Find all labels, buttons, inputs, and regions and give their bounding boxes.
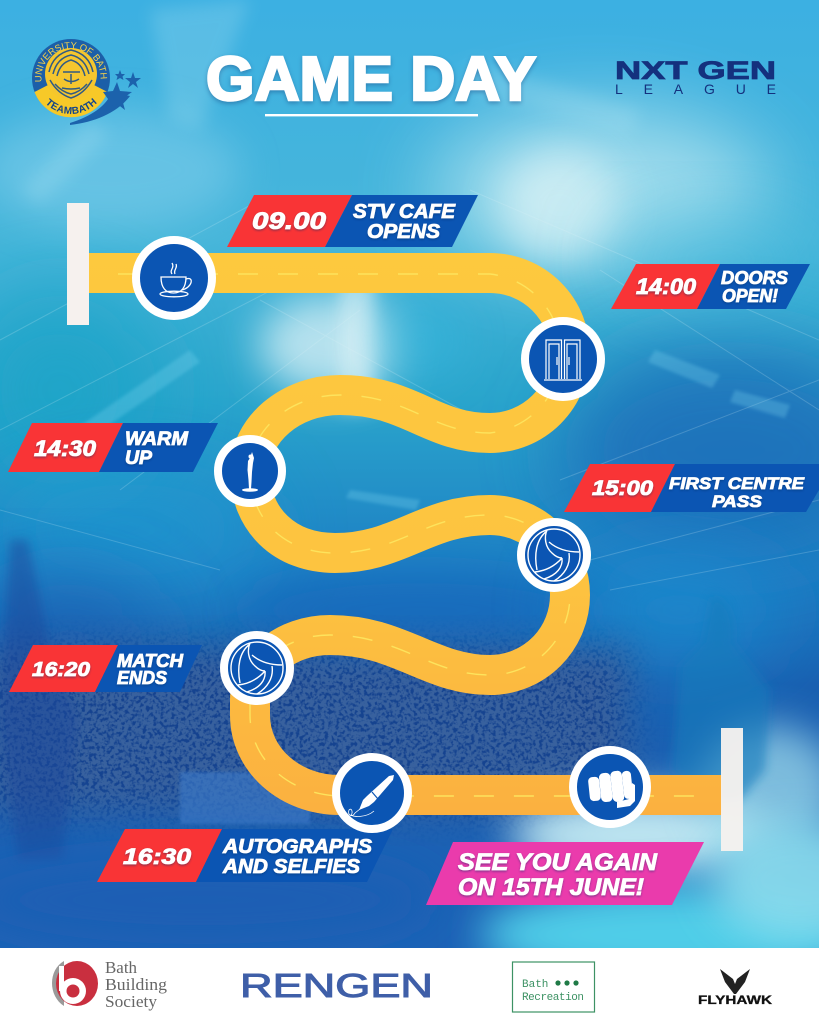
- label: 16:30 Autographs and selfies: 16:30: [123, 844, 192, 869]
- label: 14:30 Warm up: UP: [125, 448, 152, 469]
- court floor light: [510, 793, 770, 877]
- stop: netball 2: [224, 635, 290, 701]
- logo: Team Bath crest: TEAMBATH: [46, 98, 97, 114]
- crowd stands: [0, 630, 644, 827]
- label: 14:30 Warm up: WARM: [125, 429, 189, 450]
- label: 16:20 Match ends: 16:20: [32, 659, 90, 681]
- roof structure: [0, 190, 819, 590]
- logo: NXT GEN League: [615, 57, 776, 97]
- sponsor: Bath Recreation: [512, 962, 594, 1012]
- label: 15:00 First centre pass: 15:00: [592, 477, 653, 500]
- label: 09.00 STV Cafe opens: STV CAFE: [353, 201, 456, 223]
- stop: netball: [521, 522, 587, 588]
- logo: NXT GEN League: NXT GEN: [615, 57, 776, 85]
- callout: see you again: [426, 842, 704, 905]
- logo: NXT GEN League: LEAGUE: [615, 81, 776, 97]
- label: 15:00 First centre pass: FIRST CENTRE: [669, 474, 805, 493]
- sponsor: Flyhawk: [698, 969, 772, 1007]
- label: 09.00 STV Cafe opens: OPENS: [367, 221, 441, 243]
- label: 09.00 STV Cafe opens: 09.00: [252, 208, 327, 235]
- sponsor: Bath Building Society: Society: [105, 992, 158, 1011]
- callout: see you again: SEE YOU AGAIN: [458, 849, 658, 876]
- label: 16:20 Match ends: MATCH: [117, 651, 184, 671]
- stop: doors: [525, 321, 601, 397]
- sponsor: Bath Recreation: Bath: [522, 979, 548, 991]
- label: 16:30 Autographs and selfies: AND SELFIES: [222, 856, 361, 878]
- sponsor: Bath Building Society: Bath: [105, 958, 137, 977]
- label: 14:30 Warm up: 14:30: [34, 436, 97, 461]
- finish bar: [721, 728, 743, 851]
- label: 14:00 Doors open: [611, 264, 810, 309]
- label: 15:00 First centre pass: PASS: [712, 492, 763, 511]
- label: 15:00 First centre pass: [564, 464, 819, 512]
- label: 16:30 Autographs and selfies: AUTOGRAPHS: [222, 836, 373, 858]
- sponsor: Rengen: RENGEN: [240, 967, 433, 1004]
- stop: coffee: [136, 240, 212, 316]
- stop: pen: [336, 757, 408, 829]
- label: 14:30 Warm up: [8, 423, 218, 472]
- label: 09.00 STV Cafe opens: [227, 195, 478, 247]
- label: 16:20 Match ends: [9, 645, 202, 692]
- sponsor: Flyhawk: FLYHAWK: [698, 993, 772, 1007]
- logo: Team Bath crest: UNIVERSITY OF BATH: [34, 42, 108, 82]
- label: 14:00 Doors open: DOORS: [721, 268, 788, 288]
- logo: Team Bath crest: [32, 39, 141, 125]
- label: 14:00 Doors open: OPEN!: [722, 286, 778, 306]
- label: 14:00 Doors open: 14:00: [636, 274, 697, 299]
- sponsor: Bath Recreation: Recreation: [522, 992, 584, 1004]
- title: GAME DAY: [206, 45, 536, 114]
- stop: fist bump: [573, 750, 647, 824]
- callout: see you again: ON 15TH JUNE!: [458, 874, 644, 901]
- sponsor: Bath Building Society: [52, 958, 168, 1011]
- label: 16:20 Match ends: ENDS: [117, 668, 167, 688]
- sponsor: Bath Building Society: Building: [105, 975, 168, 994]
- label: 16:30 Autographs and selfies: [97, 829, 393, 882]
- stop: statue figure: [218, 439, 282, 503]
- player silhouette: [672, 596, 770, 800]
- start bar: [67, 203, 89, 325]
- road: [85, 273, 722, 796]
